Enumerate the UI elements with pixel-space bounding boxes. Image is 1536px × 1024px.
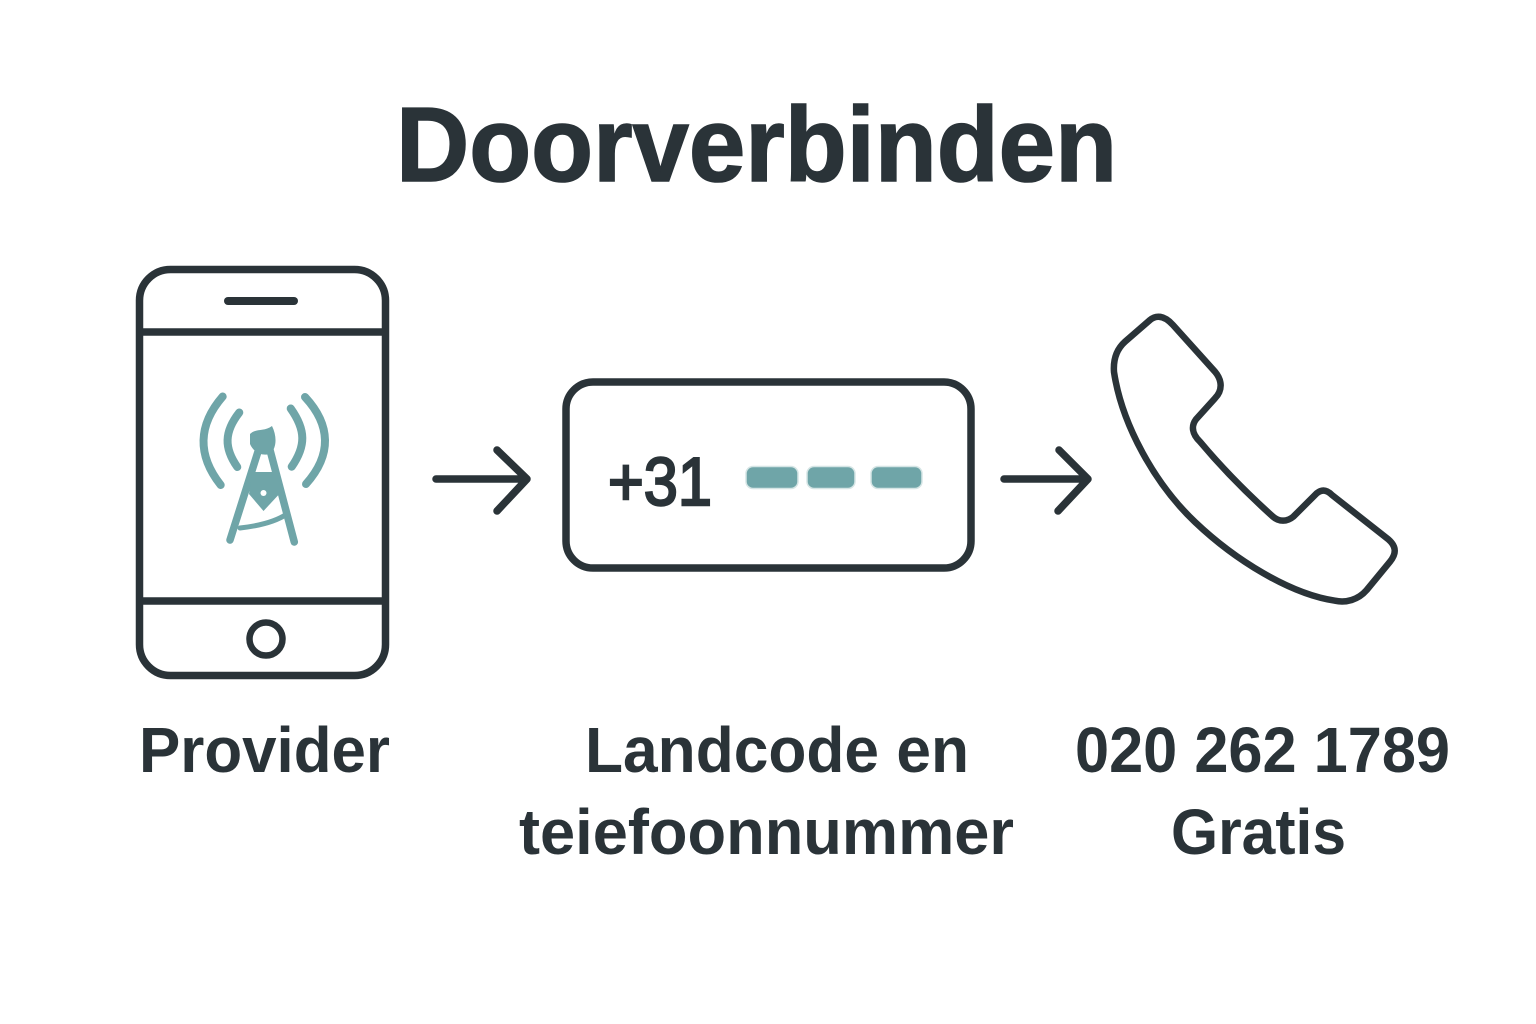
icon: signal tower — [204, 396, 325, 542]
label: gratis nummer — [1075, 714, 1450, 868]
label: landcode en telefoonnummer: Landcode en — [585, 714, 969, 786]
arrow: number to handset — [1004, 450, 1088, 511]
label: gratis nummer: Gratis — [1171, 796, 1346, 868]
label: landcode en telefoonnummer: teiefoonnummer — [519, 796, 1014, 868]
number placeholders — [746, 466, 922, 488]
icon: smartphone with signal tower — [140, 270, 386, 676]
panel: phone number box — [566, 382, 971, 568]
label: provider: Provider — [139, 714, 390, 786]
arrow: provider to number — [436, 450, 527, 511]
label: landcode en telefoonnummer — [519, 714, 1014, 868]
country code: +31 — [608, 444, 712, 520]
icon: telephone handset — [1114, 317, 1395, 601]
label: gratis nummer: 020 262 1789 — [1075, 714, 1450, 786]
title: Doorverbinden — [396, 86, 1117, 204]
